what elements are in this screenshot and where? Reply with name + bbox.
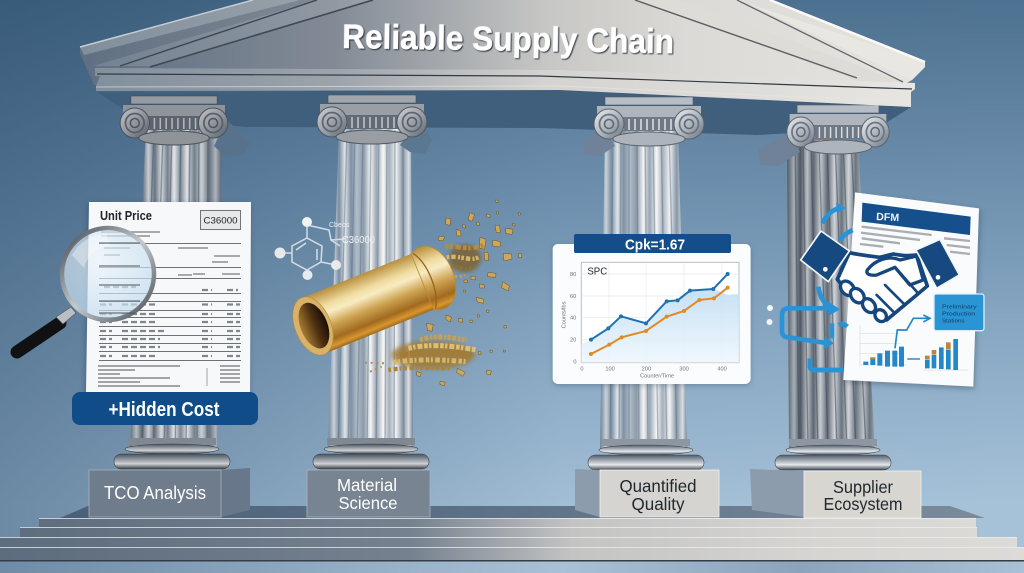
badge: Cpk value: Cpk=1.67: [625, 236, 685, 254]
molecule diagram: [274, 217, 375, 280]
badge: Cpk value: [574, 234, 731, 254]
entablature band: [95, 68, 915, 107]
blue callout: Stations: [942, 319, 965, 325]
title: Reliable Supply Chain: [342, 18, 674, 61]
DFM header band: [862, 203, 971, 235]
column 3: [583, 97, 704, 470]
DFM header band: DFM: [876, 211, 900, 224]
blue callout: [934, 294, 984, 331]
chart axis labels: 0: [573, 360, 576, 366]
column 2: [313, 95, 432, 469]
orange series: [589, 286, 730, 356]
plinth: Material Science: Material: [337, 475, 397, 495]
badge: hidden cost: +Hidden Cost: [108, 399, 220, 421]
column 1: [114, 96, 250, 469]
icon: handshake: [801, 231, 959, 324]
chart axis labels: Counts/lbs: [561, 301, 567, 328]
brass particles: [365, 200, 522, 386]
badge: hidden cost: [72, 392, 258, 425]
soffit under the entablature: [97, 90, 911, 135]
chart axis labels: Counter/Time: [640, 374, 674, 380]
plinth: Supplier Ecosystem: Ecosystem: [824, 494, 902, 514]
blue process arrows: [782, 208, 853, 370]
chart axis labels: SPC: [587, 266, 607, 277]
plinth: Quantified Quality: [575, 469, 719, 517]
column 4: [758, 105, 891, 470]
chart axis labels: 20: [570, 337, 576, 343]
plinth: Material Science: Science: [338, 493, 398, 513]
brass bushing tube: [284, 239, 464, 363]
chart area: [581, 289, 739, 363]
molecule labels: C36000: [342, 234, 375, 246]
sheet bar chart: [860, 315, 968, 370]
plinth: Quantified Quality: Quantified: [620, 476, 696, 496]
panel: invoice document: [86, 202, 251, 392]
invoice table: [98, 232, 241, 386]
panel: DFM document with handshake: [782, 192, 984, 387]
plinth: Supplier Ecosystem: [750, 469, 921, 518]
platform and steps: [0, 506, 1024, 573]
white connector dots: [766, 305, 773, 325]
chart axis labels: 300: [679, 366, 689, 372]
panel: SPC chart card: [553, 244, 751, 384]
pediment roof: [80, 0, 925, 85]
chart axis labels: 80: [570, 272, 576, 278]
blue series: [589, 272, 730, 342]
chart axis labels: 100: [605, 366, 615, 372]
blue callout: Production: [942, 312, 975, 318]
molecule labels: Cbeos: [329, 222, 350, 229]
blue callout: Preliminary: [942, 304, 977, 310]
plinth: Material Science: [307, 470, 430, 517]
DFM sheet: [843, 192, 979, 387]
plinth: TCO Analysis: [89, 468, 250, 517]
chart axis labels: 0: [580, 366, 583, 372]
chart axis labels: 60: [570, 294, 576, 300]
plinth: Supplier Ecosystem: Supplier: [833, 477, 893, 497]
plinth: Quantified Quality: Quality: [632, 494, 685, 514]
chart axis labels: 40: [570, 316, 576, 322]
invoice heading: Unit Price: [100, 209, 152, 223]
material code box: C36000: [204, 216, 238, 226]
molecule labels: [329, 222, 375, 246]
chart axis labels: 200: [642, 366, 651, 372]
chart axis labels: 400: [717, 366, 727, 372]
chart axis labels: [561, 266, 727, 380]
plinth: TCO Analysis: TCO Analysis: [104, 483, 206, 503]
material code box: [200, 210, 240, 230]
icon: magnifying glass: [17, 228, 154, 352]
